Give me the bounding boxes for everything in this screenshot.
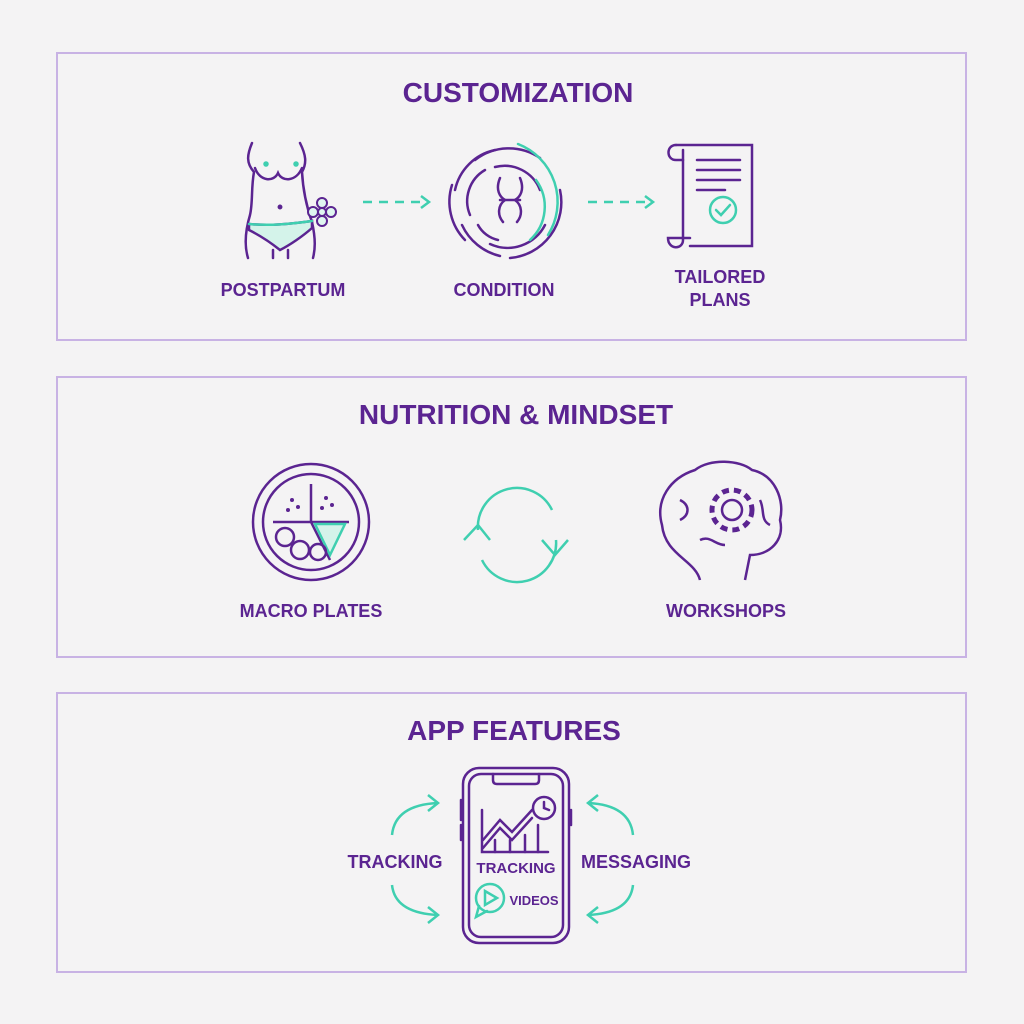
heading: app features: APP FEATURES	[407, 715, 621, 746]
panel: app features: TRACKING	[348, 852, 442, 872]
panel: nutrition & mindset	[57, 377, 966, 657]
labels	[221, 267, 765, 310]
panel: app features: MESSAGING	[581, 852, 691, 872]
labels: POSTPARTUM	[221, 280, 345, 300]
icon: macro plate	[253, 464, 369, 580]
labels: CONDITION	[454, 280, 554, 300]
panel: app features: VIDEOS	[509, 893, 559, 908]
heading: customization: CUSTOMIZATION	[403, 77, 633, 108]
icon: brain with gear	[660, 462, 781, 580]
icon: condition swirl	[449, 144, 561, 258]
panel: nutrition & mindset: MACRO PLATES	[240, 601, 382, 621]
arrows: side loops	[392, 795, 633, 923]
arrow: dashed 1	[363, 196, 429, 208]
icon: tailored plan document	[668, 145, 752, 247]
panel: app features: TRACKING	[476, 860, 556, 877]
icon: phone	[461, 768, 571, 943]
icon: cycle arrows	[464, 488, 568, 582]
heading: nutrition & mindset: NUTRITION & MINDSET	[359, 399, 673, 430]
labels: PLANS	[689, 290, 751, 310]
panel: nutrition & mindset: WORKSHOPS	[666, 601, 786, 621]
labels: TAILORED	[675, 267, 765, 287]
icon: postpartum body	[246, 143, 336, 258]
panel: customization	[57, 53, 966, 340]
arrow: dashed 2	[588, 196, 653, 208]
panel: app features	[57, 693, 966, 972]
